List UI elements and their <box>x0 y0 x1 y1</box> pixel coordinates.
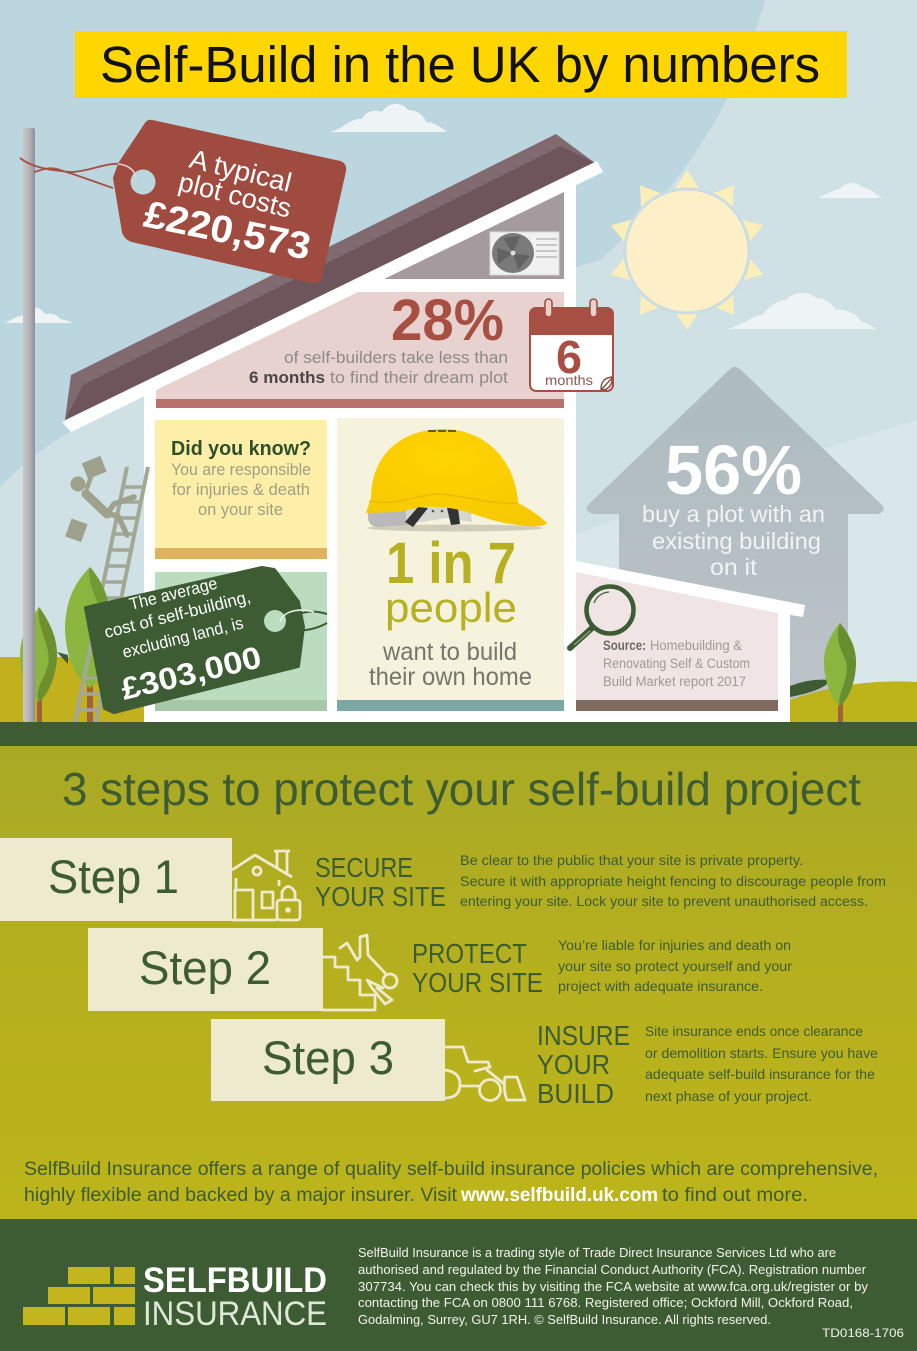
legal text: SelfBuild Insurance is a trading style of Trade Direct Insurance Services Ltd who are <box>358 1246 836 1260</box>
ground hills <box>0 652 917 722</box>
price tag: average build cost: The average <box>127 574 219 614</box>
main house <box>62 134 603 722</box>
step 3: BUILD <box>537 1078 614 1109</box>
annex building <box>576 561 805 722</box>
price tag: average build cost: £303,000 <box>117 639 265 707</box>
price tag: average build cost: cost of self-building, <box>102 587 253 642</box>
step 1: Step 1 <box>48 850 179 903</box>
icon: person falling down stairs <box>323 935 397 1010</box>
legal text: Godalming, Surrey, GU7 1RH. © SelfBuild Insurance. All rights reserved. <box>358 1313 771 1327</box>
panel: did you know: You are responsible <box>171 460 311 479</box>
icon: calendar 6 months <box>530 299 613 391</box>
step 1: YOUR SITE <box>315 881 446 912</box>
icon: calendar 6 months: months <box>545 372 593 388</box>
icon: digger <box>445 1047 525 1100</box>
logo <box>23 1261 327 1333</box>
step 3: YOUR <box>537 1049 610 1080</box>
step 1: entering your site. Lock your site to prevent unauthorised access. <box>460 893 868 909</box>
reference code: TD0168-1706 <box>822 1326 904 1340</box>
price tag: typical plot cost: plot costs <box>176 167 294 224</box>
price tag: typical plot cost <box>20 122 344 281</box>
price tag: average build cost <box>86 568 327 712</box>
title banner: Self-Build in the UK by numbers <box>100 36 820 93</box>
panel: 1 in 7: 1 in 7 <box>386 531 516 596</box>
price tag: typical plot cost: A typical <box>187 144 295 198</box>
closing paragraph: www.selfbuild.uk.com <box>460 1185 658 1206</box>
annex building: Source: <box>603 638 646 653</box>
olive section background <box>0 746 917 1219</box>
step 3: or demolition starts. Ensure you have <box>645 1045 878 1061</box>
step 1: SECURE <box>315 852 413 883</box>
icon: house with padlock <box>232 851 300 920</box>
icon: calendar 6 months: 6 <box>556 331 582 383</box>
panel: did you know: for injuries & death <box>172 480 310 499</box>
step 2: YOUR SITE <box>412 967 543 998</box>
icon: yellow hard hat <box>366 429 547 532</box>
panel: 28 percent room: of self-builders take less than <box>284 348 508 367</box>
icon: falling worker on ladder <box>65 456 148 722</box>
grey house: 56% statistic <box>586 367 884 722</box>
step 2: Step 2 <box>139 941 271 994</box>
house walls <box>144 185 576 722</box>
icon: air conditioning unit <box>490 232 559 275</box>
panel: 1 in 7: people <box>385 584 517 631</box>
step 2 <box>88 928 792 1011</box>
step 2: your site so protect yourself and your <box>558 958 792 974</box>
price tag: average build cost: excluding land, is <box>120 613 245 662</box>
icon: magnifying glass <box>570 586 634 648</box>
legal text: contacting the FCA on 0800 111 6768. Registered office; Ockford Mill, Ockford Road, <box>358 1296 853 1310</box>
step 1: Secure it with appropriate height fencing to discourage people from <box>460 873 886 889</box>
closing paragraph <box>24 1159 878 1206</box>
grey house: 56% statistic: on it <box>710 554 758 580</box>
step 3: Step 3 <box>262 1031 394 1084</box>
footer band <box>0 1219 917 1351</box>
panel: 1 in 7: want to build <box>382 638 517 666</box>
closing paragraph: highly flexible and backed by a major insurer. Visit <box>24 1185 458 1206</box>
logo: SELFBUILD <box>143 1261 327 1300</box>
grey house: 56% statistic: buy a plot with an <box>642 501 825 527</box>
logo: INSURANCE <box>143 1295 327 1333</box>
tree: right <box>824 623 856 722</box>
annex building: Homebuilding & <box>650 638 742 653</box>
step 3: adequate self-build insurance for the <box>645 1066 875 1082</box>
legal text: 307734. You can check this by visiting the FCA website at www.fca.org.uk/register or by <box>358 1280 869 1294</box>
step 3 <box>211 1019 878 1109</box>
clouds <box>5 104 882 329</box>
icon: brick wall <box>23 1267 135 1325</box>
panel: 28 percent room: 6 months <box>249 368 325 387</box>
roof white trim <box>62 161 603 432</box>
step 3: INSURE <box>537 1020 630 1051</box>
step 3: Site insurance ends once clearance <box>645 1023 863 1039</box>
tree: far left <box>20 607 57 722</box>
dark green ground band <box>0 722 917 746</box>
price tag: typical plot cost: £220,573 <box>140 194 314 269</box>
panel: did you know: Did you know? <box>171 438 311 460</box>
closing paragraph: to find out more. <box>662 1185 808 1206</box>
step 2: project with adequate insurance. <box>558 978 763 994</box>
step 1: Be clear to the public that your site is private property. <box>460 852 803 868</box>
attic room <box>384 192 564 279</box>
panel: 1 in 7 <box>337 418 564 711</box>
panel: did you know <box>155 420 327 559</box>
section heading: 3 steps to protect your self-build project <box>62 763 861 815</box>
step 2: PROTECT <box>412 938 527 969</box>
tree: centre left <box>65 567 115 722</box>
step 1 <box>0 838 886 921</box>
step 3: next phase of your project. <box>645 1088 812 1104</box>
panel: 28 percent room: 28% <box>391 288 504 353</box>
annex building: Build Market report 2017 <box>603 674 746 689</box>
panel: 1 in 7: their own home <box>369 663 532 691</box>
closing paragraph: SelfBuild Insurance offers a range of quality self-build insurance policies which are comprehensive, <box>24 1159 878 1180</box>
legal text <box>358 1246 869 1327</box>
step 2: You’re liable for injuries and death on <box>558 937 791 953</box>
lamp pole <box>23 128 35 722</box>
grey house: 56% statistic: 56% <box>665 431 802 509</box>
legal text: authorised and regulated by the Financial Conduct Authority (FCA). Registration number <box>358 1263 866 1277</box>
grey house: 56% statistic: existing building <box>652 528 821 554</box>
panel: green room <box>155 572 327 711</box>
roof <box>65 134 595 420</box>
sun <box>606 170 768 330</box>
panel: did you know: on your site <box>198 500 283 519</box>
panel: 28 percent room: to find their dream plot <box>330 368 508 387</box>
panel: 28 percent room <box>156 288 564 408</box>
sky background <box>0 0 917 730</box>
annex building: Renovating Self & Custom <box>603 656 750 671</box>
